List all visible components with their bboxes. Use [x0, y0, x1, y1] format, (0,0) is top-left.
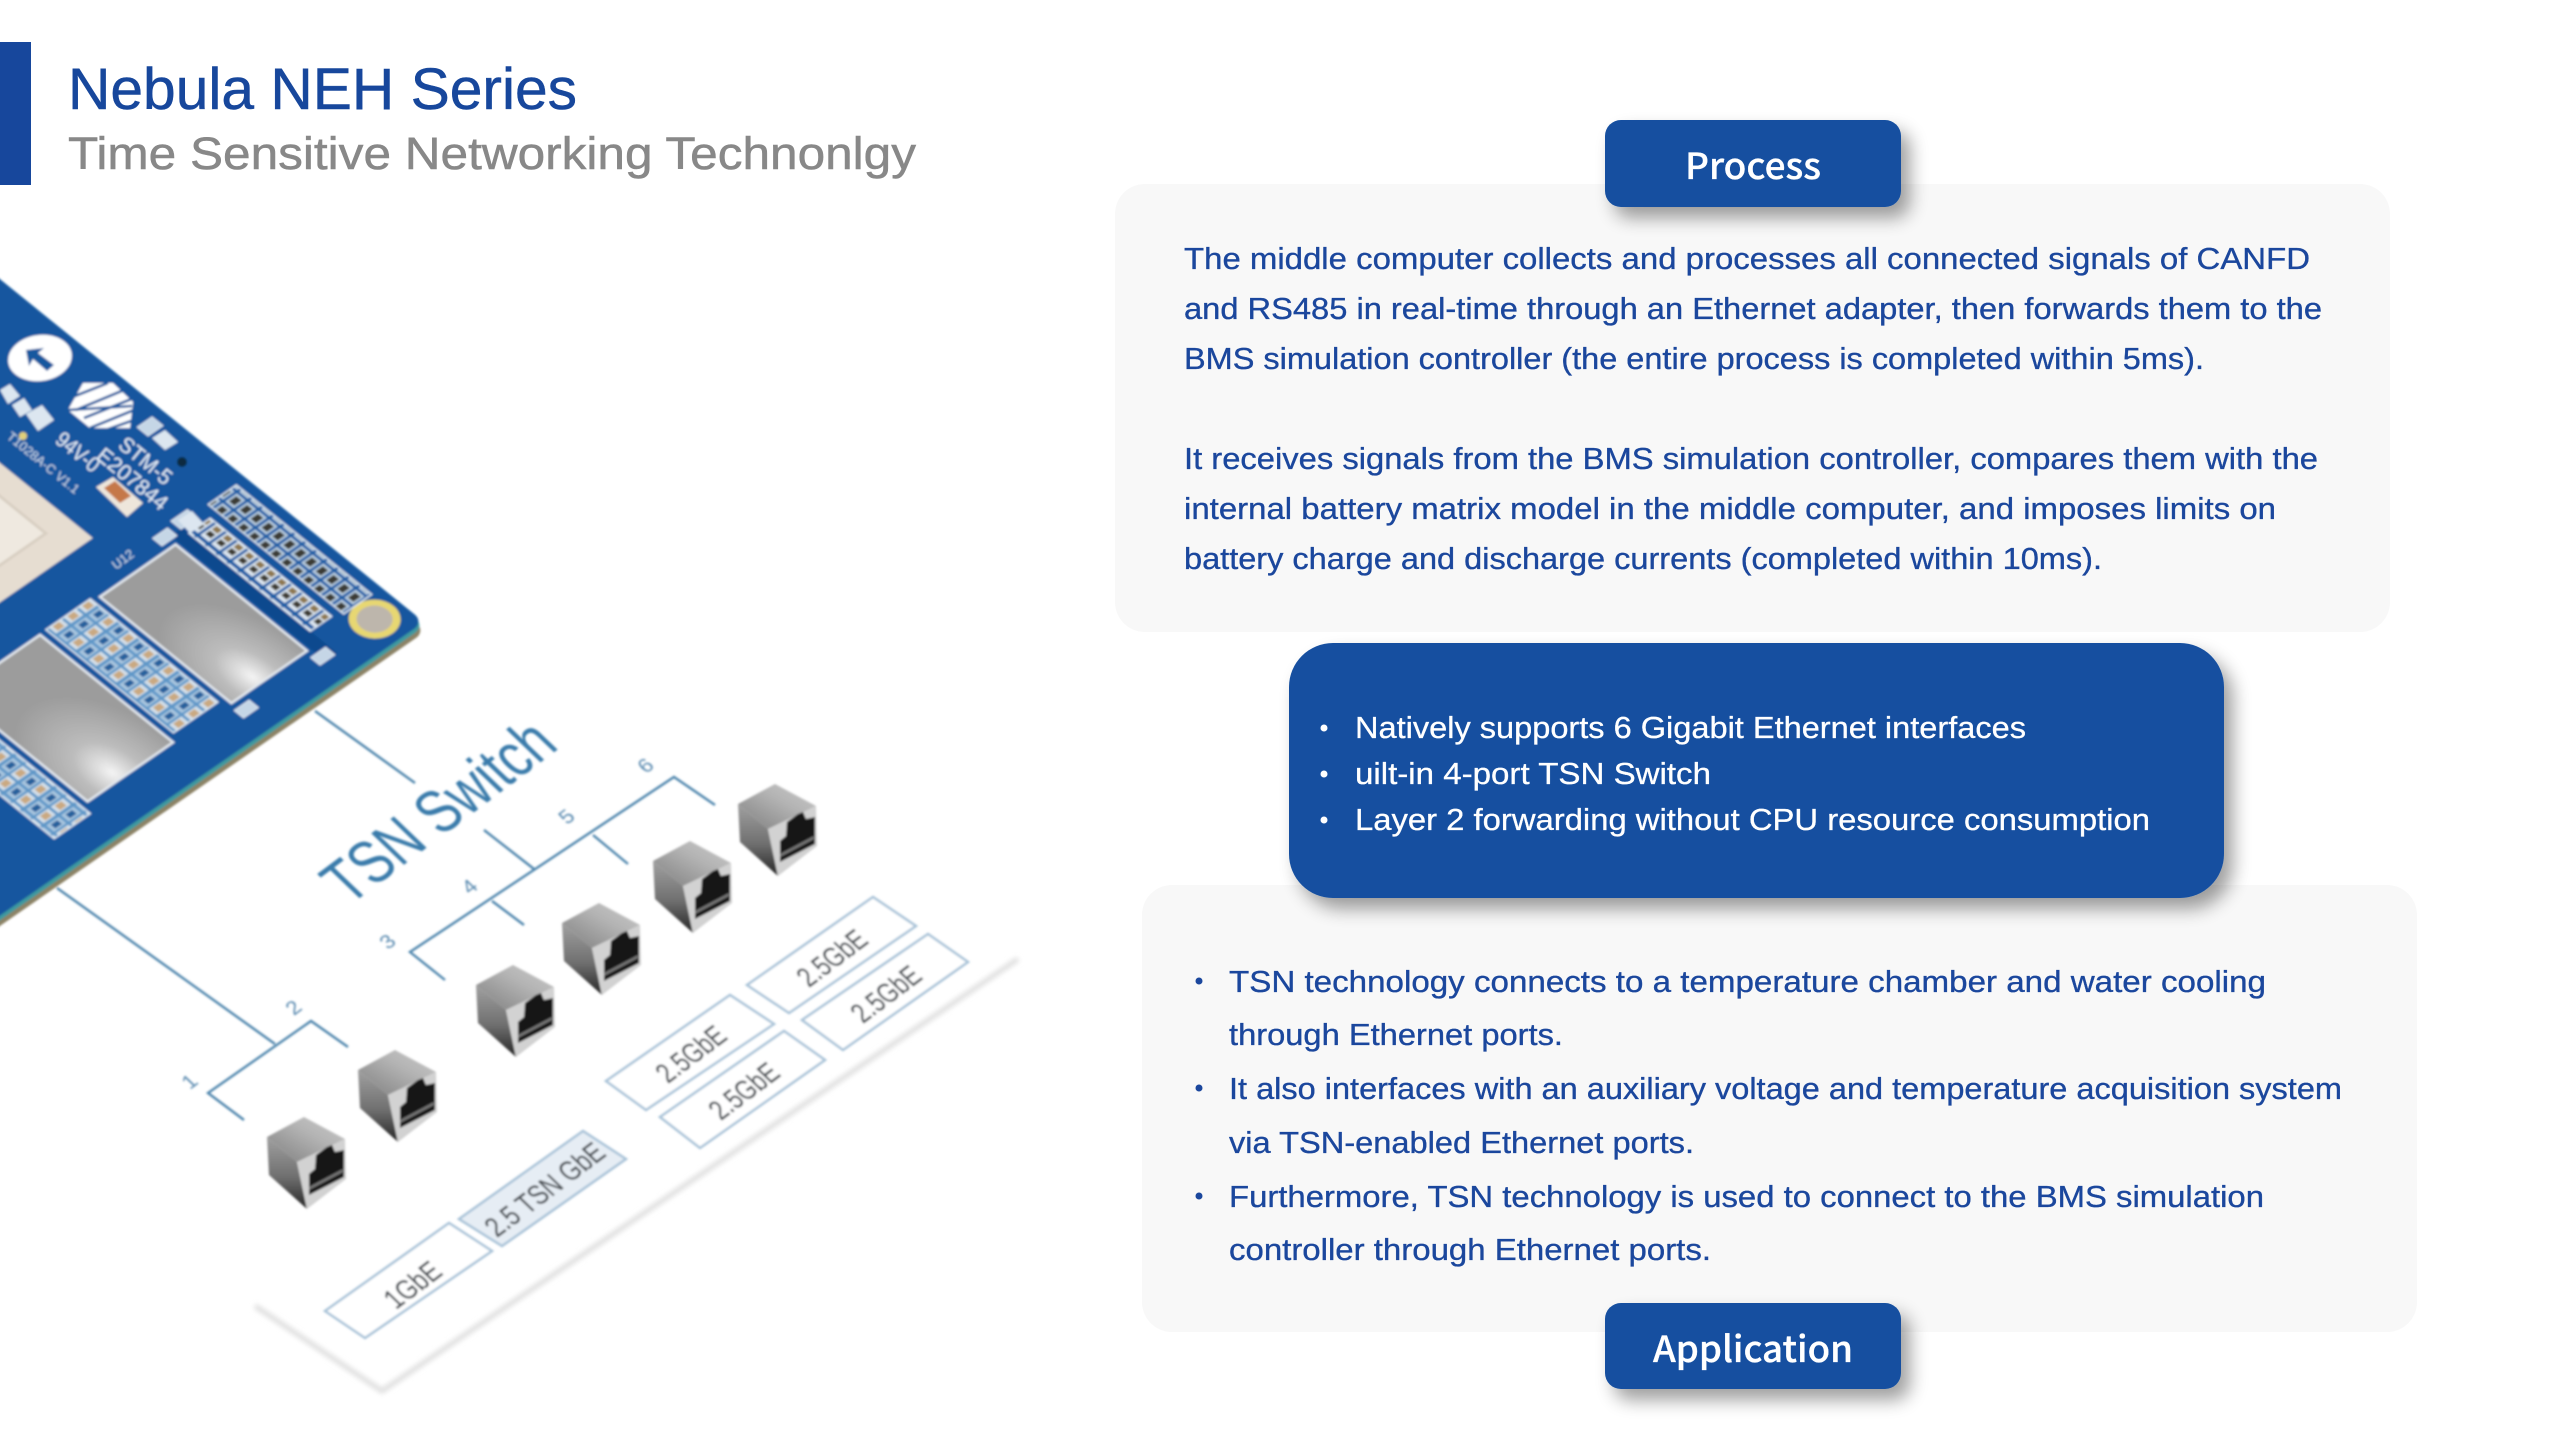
silkscreen text: E207844	[92, 443, 173, 515]
port numbers: 6	[633, 755, 659, 777]
callout bullet list: uilt-in 4-port TSN Switch	[1355, 756, 1711, 791]
port speed label: 2.5GbE	[606, 995, 774, 1110]
port numbers	[177, 755, 659, 1093]
process panel background	[1115, 184, 2390, 632]
trace shading	[171, 528, 337, 661]
process heading button: Process	[1685, 138, 1821, 190]
pad row B	[189, 518, 332, 631]
application bullet list: controller through Ethernet ports.	[1229, 1232, 1711, 1267]
resistor	[96, 477, 143, 517]
silkscreen text: 94V-0	[51, 427, 105, 477]
application heading button	[1605, 1303, 1901, 1389]
callout bullet list	[1320, 710, 2150, 837]
application bullet list: through Ethernet ports.	[1229, 1017, 1563, 1052]
panel: application	[1142, 885, 2417, 1332]
port speed label: 2.5GbE	[747, 897, 916, 1013]
panel: process	[1115, 184, 2390, 632]
feature callout box	[1289, 643, 2224, 898]
port speed label: 2.5GbE: 2.5GbE	[702, 1057, 787, 1126]
process description text: battery charge and discharge currents (completed within 10ms).	[1184, 541, 2102, 576]
silkscreen text: T1028A-C V1.1	[4, 429, 83, 497]
port speed label: 2.5GbE	[660, 1031, 825, 1148]
port speed label: 2.5 TSN GbE: 2.5 TSN GbE	[478, 1137, 612, 1243]
process description text: The middle computer collects and processes all connected signals of CANFD	[1184, 241, 2310, 276]
port numbers: 2	[281, 997, 307, 1019]
port speed label: 2.5GbE: 2.5GbE	[844, 960, 929, 1029]
title: Nebula NEH Series	[68, 57, 577, 122]
silkscreen text: STM-5	[114, 432, 177, 490]
port numbers: 1	[177, 1071, 203, 1093]
base plate shadow	[255, 959, 1018, 1391]
metal shield 1	[100, 545, 307, 703]
process description text: It receives signals from the BMS simulation controller, compares them with the	[1184, 441, 2318, 476]
application panel background	[1142, 885, 2417, 1332]
pad row A	[208, 485, 372, 614]
TSN Switch label: TSN Switch	[306, 706, 570, 916]
callout bullet list: Layer 2 forwarding without CPU resource consumption	[1355, 802, 2150, 837]
port speed label: 1GbE: 1GbE	[377, 1256, 449, 1315]
metal shield 2	[0, 635, 173, 802]
connector lines	[57, 711, 715, 1120]
subtitle: Time Sensitive Networking Technonlgy	[68, 128, 917, 179]
circuit board	[0, 122, 426, 1086]
silkscreen direction arrow badge	[5, 331, 75, 385]
silkscreen text	[4, 427, 177, 572]
RJ45 port 1	[267, 1117, 346, 1209]
main chip face	[0, 321, 46, 710]
RJ45 port 3	[476, 965, 555, 1057]
RJ45 port 5	[653, 841, 732, 933]
silkscreen logo	[68, 383, 134, 432]
process description text: BMS simulation controller (the entire process is completed within 5ms).	[1184, 341, 2204, 376]
RJ45 port 2	[358, 1050, 437, 1142]
process description text: internal battery matrix model in the middle computer, and imposes limits on	[1184, 491, 2276, 526]
port speed label: 2.5 TSN GbE	[459, 1131, 626, 1246]
small pads	[1, 417, 395, 718]
main chip	[0, 288, 93, 743]
board surface and components	[0, 122, 424, 1077]
mounting hole	[338, 592, 411, 647]
port numbers: 5	[554, 806, 580, 828]
application bullet list: via TSN-enabled Ethernet ports.	[1229, 1125, 1694, 1160]
lower pad rows	[0, 704, 90, 839]
callout background	[1289, 643, 2224, 898]
application heading button: Application	[1653, 1321, 1853, 1373]
product diagram: TSN switch board and ports	[0, 122, 1018, 1391]
callout bullet list: Natively supports 6 Gigabit Ethernet interfaces	[1355, 710, 2026, 745]
port speed label: 2.5GbE	[802, 934, 968, 1050]
silkscreen text: U12	[109, 546, 137, 572]
port numbers: 3	[375, 931, 401, 953]
port speed label: 2.5GbE: 2.5GbE	[649, 1020, 734, 1089]
board edge highlight	[0, 126, 425, 1081]
board edge	[0, 131, 426, 1086]
application bullet list: It also interfaces with an auxiliary voltage and temperature acquisition system	[1229, 1071, 2342, 1106]
application bullet list	[1196, 964, 2342, 1267]
header accent bar	[0, 42, 31, 185]
process heading button	[1605, 120, 1901, 207]
port speed label: 2.5GbE: 2.5GbE	[790, 924, 875, 993]
process description text: and RS485 in real-time through an Ethernet adapter, then forwards them to the	[1184, 291, 2322, 326]
port speed label: 1GbE	[325, 1223, 492, 1338]
RJ45 port 4	[562, 903, 641, 995]
small components near logo	[0, 384, 204, 533]
port numbers: 4	[457, 875, 483, 898]
process description text	[1184, 241, 2322, 576]
pad block between shields	[46, 599, 218, 733]
RJ45 port 6	[738, 784, 817, 876]
application bullet list: Furthermore, TSN technology is used to connect to the BMS simulation	[1229, 1179, 2264, 1214]
application bullet list: TSN technology connects to a temperature chamber and water cooling	[1229, 964, 2266, 999]
